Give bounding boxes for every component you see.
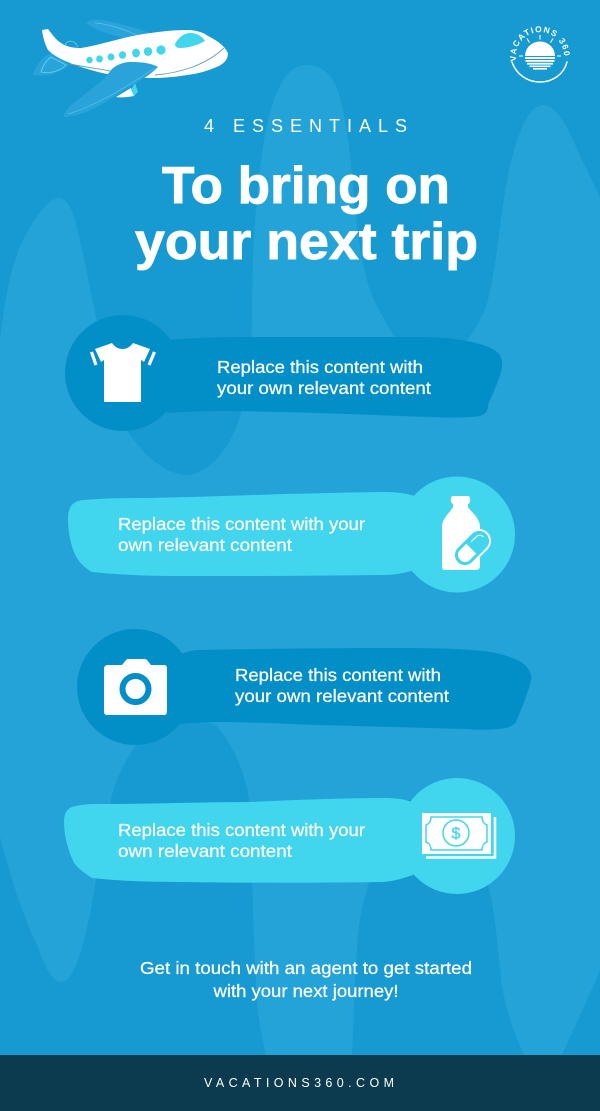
item 3 banner	[180, 648, 531, 730]
title: To bring on	[162, 157, 450, 215]
item 1 banner	[165, 337, 502, 418]
item 3 circle	[77, 629, 193, 745]
front wing	[63, 62, 158, 117]
item 2 text	[118, 514, 365, 555]
item 2 banner	[68, 492, 415, 576]
item 1 text: your own relevant content	[217, 378, 431, 398]
item 3 text: your own relevant content	[235, 686, 449, 706]
item 4 banner	[64, 798, 415, 883]
engine	[116, 88, 134, 97]
logo smile	[512, 62, 567, 82]
logo: Vacations 360	[510, 26, 570, 83]
item 4 circle	[399, 778, 515, 894]
item 1 text: Replace this content with	[217, 357, 423, 377]
footer bar	[0, 1055, 600, 1111]
item 4 text: own relevant content	[118, 841, 292, 861]
closing message: with your next journey!	[212, 981, 398, 1001]
logo sun	[525, 42, 555, 56]
title	[135, 157, 478, 271]
item 1 text	[217, 357, 431, 398]
back wing	[86, 20, 152, 39]
item 4 text	[118, 820, 365, 861]
item 2: medicine	[68, 476, 515, 592]
footer website: VACATIONS360.COM	[204, 1076, 394, 1090]
item 1: clothing	[65, 315, 502, 431]
icon: t-shirt	[92, 343, 154, 402]
item 3: camera	[77, 629, 531, 745]
cabin windows	[86, 45, 166, 63]
closing message: Get in touch with an agent to get started	[140, 958, 472, 978]
title: your next trip	[135, 213, 478, 271]
icon: bottle and pill	[442, 496, 496, 572]
illustration: airplane	[33, 20, 228, 117]
item 3 text: Replace this content with	[235, 665, 441, 685]
item 1 circle	[65, 315, 181, 431]
fuselage	[42, 29, 228, 78]
cockpit window	[175, 33, 205, 48]
item 4 text: Replace this content with your	[118, 820, 365, 840]
item 2 text: Replace this content with your	[118, 514, 365, 534]
icon: banknotes	[422, 813, 495, 858]
tail fin	[33, 53, 70, 76]
subtitle: 4 ESSENTIALS	[204, 116, 407, 136]
icon: camera	[104, 659, 167, 715]
item 3 text	[235, 665, 449, 706]
item 2 text: own relevant content	[118, 535, 292, 555]
item 2 circle	[399, 476, 515, 592]
logo wordmark: VACATIONS 360	[510, 26, 570, 62]
closing message	[140, 958, 472, 1001]
icon: banknotes: $	[452, 826, 461, 842]
item 4: money	[64, 778, 515, 894]
